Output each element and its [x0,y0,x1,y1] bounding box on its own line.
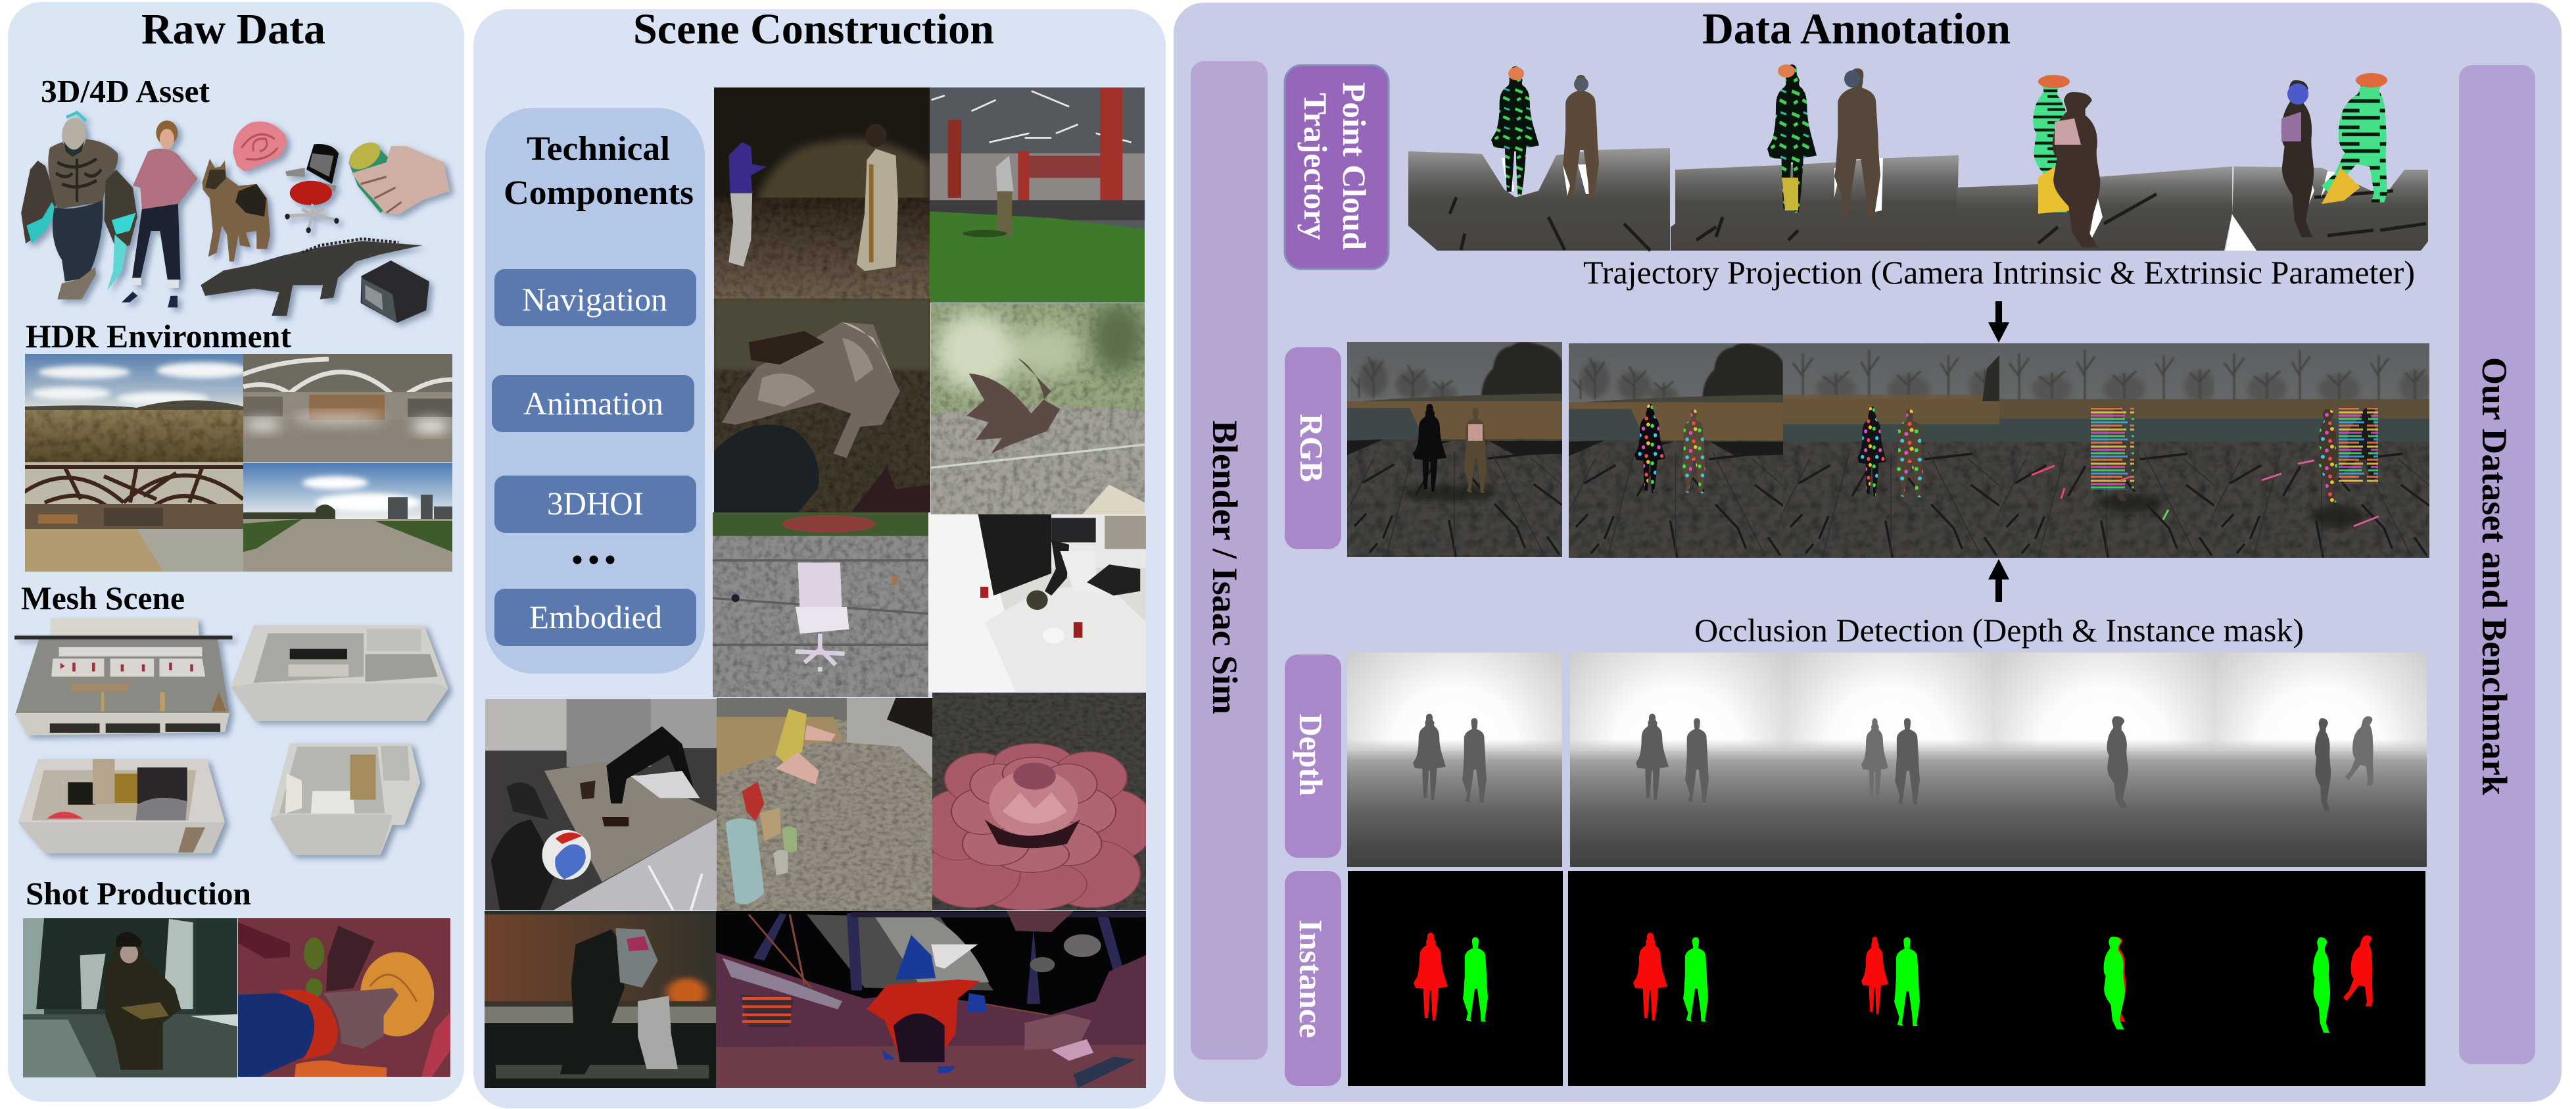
icon: office chair [285,144,339,233]
image: robot in white room [928,514,1146,692]
arrow: trajectory projection down to RGB [1988,301,2009,343]
panel background: scene construction [473,9,1166,1108]
image: industrial hall HDR environment [243,354,452,462]
label: Point Cloud Trajectory [1285,65,1389,269]
icon: crocodile [201,239,423,316]
RGB frame 3 with short tracks [1783,343,2001,558]
3D and 4D asset collection [21,112,450,323]
button: 3DHOI [494,476,696,533]
panel: Technical Components [485,108,705,674]
label: RGB [1285,347,1341,549]
RGB frame 5 with long tracks [2214,343,2431,558]
RGB frame 2 with tracked points [1569,343,1783,558]
button: Navigation [494,269,696,326]
image: woman in gym [930,87,1145,303]
white halos [1502,158,2335,251]
image: park HDR environment [243,463,452,572]
button: Navigation: Navigation [522,281,667,318]
point cloud ground 4 [2232,166,2428,251]
mesh scene: living room [18,759,225,853]
label: Instance [1285,871,1341,1086]
depth frame 2 [1570,653,1785,867]
vertical bar: Blender / Isaac Sim [1191,61,1268,1060]
text: Occlusion Detection: Occlusion Detection (Depth & Instance mask) [1694,612,2304,649]
image: bat in nature [931,303,1145,514]
point cloud ground 1 [1408,148,1670,251]
ground cracks [1450,191,2426,251]
icon: hand holding cup [345,137,450,214]
mesh scene: apartment [231,626,448,721]
depth frame 1 [1347,653,1562,867]
heading: Shot Production: Shot Production [26,875,251,912]
vertical bar: Our Dataset and Benchmark [2459,65,2535,1064]
button: Embodied [494,589,696,646]
arrow: occlusion detection up to RGB [1988,559,2009,602]
button: 3DHOI: 3DHOI [547,485,644,522]
heading: Mesh Scene: Mesh Scene [21,580,185,616]
image: field HDR environment [25,354,243,462]
ellipsis dots [573,555,614,564]
image: two women in dark forest [714,87,930,299]
image: shot of cartoon hand pressing a button [238,918,450,1077]
icon: woman [122,120,198,307]
label: Point Cloud Trajectory: Trajectory [1297,93,1334,240]
image: robot arm at desk [485,699,717,910]
mesh scene: bedroom [270,743,420,855]
heading: HDR Environment: HDR Environment [26,318,291,355]
image: glass roof HDR environment [25,463,243,572]
button: Animation [492,375,694,432]
instance masks frame 2 [1633,933,1708,1022]
instance mask frame 1 [1348,871,1563,1086]
image: cartoon cockpit scene [716,911,1146,1088]
label: Point Cloud Trajectory: Point Cloud [1336,82,1373,250]
depth frame 5 [2214,653,2427,867]
panel background: data annotation [1174,3,2562,1102]
technical components background [485,108,705,674]
depth frames [1347,653,2427,867]
heading: Technical Components: Components [504,174,694,212]
image: fantasy horse [714,299,930,512]
icon: rose [233,122,286,172]
point cloud frames [1408,64,2428,251]
RGB frame 4 with long tracks [1999,343,2216,558]
vertical bar: Blender / Isaac Sim: Blender / Isaac Sim [1205,420,1245,714]
image: close-up of flower [932,693,1146,910]
text: Trajectory Projection: Trajectory Projection (Camera Intrinsic & Extrinsic Parameter) [1583,254,2415,291]
point cloud person pair frame 3 [2033,75,2100,247]
image: chair on wooden deck [713,512,928,697]
heading: Technical Components: Technical [527,130,670,168]
point cloud person pair frame 4 [2281,73,2387,237]
point cloud person pair frame 2 [1767,64,1880,217]
instance mask frames 2 to 5 [1568,871,2425,1086]
icon: microwave [361,260,429,323]
depth frame 3 [1785,653,1995,867]
icon: monster [21,112,137,299]
instance masks frame 5 [2313,935,2373,1033]
heading: Data Annotation: Data Annotation [1702,5,2011,53]
mesh scene: showroom [14,618,233,735]
heading: 3D/4D Asset: 3D/4D Asset [41,73,210,109]
label: Instance: Instance [1293,920,1329,1038]
point cloud ground 2 [1671,155,1959,251]
instance masks frame 4 [2104,937,2126,1029]
button: Animation: Animation [523,385,663,422]
image: shot of crouching old man [23,918,237,1077]
point cloud ground 3 [1957,166,2232,251]
panel: Scene Construction [473,5,1166,1108]
button: Embodied: Embodied [529,599,662,635]
depth frame 4 [1995,653,2214,867]
label: Depth [1285,654,1341,858]
heading: Technical Components [504,130,694,212]
label: Depth: Depth [1293,714,1329,796]
panel background: raw data [8,2,464,1102]
panel: Raw Data [8,2,464,1102]
point cloud person pair frame 1 [1491,66,1599,198]
icon: dog [203,159,270,262]
RGB frames [1347,342,2431,558]
heading: Raw Data: Raw Data [141,5,325,53]
RGB frame 1 [1347,342,1562,557]
image: hands holding milk carton [717,698,932,911]
image: dark robot scene [485,911,716,1088]
mesh scene models [14,618,448,855]
heading: Scene Construction: Scene Construction [633,5,994,53]
instance masks frame 3 [1861,937,1920,1026]
label: RGB: RGB [1293,414,1330,482]
panel: Data Annotation [1174,3,2562,1102]
vertical bar: Our Dataset and Benchmark: Our Dataset and Benchmark [2475,357,2514,795]
